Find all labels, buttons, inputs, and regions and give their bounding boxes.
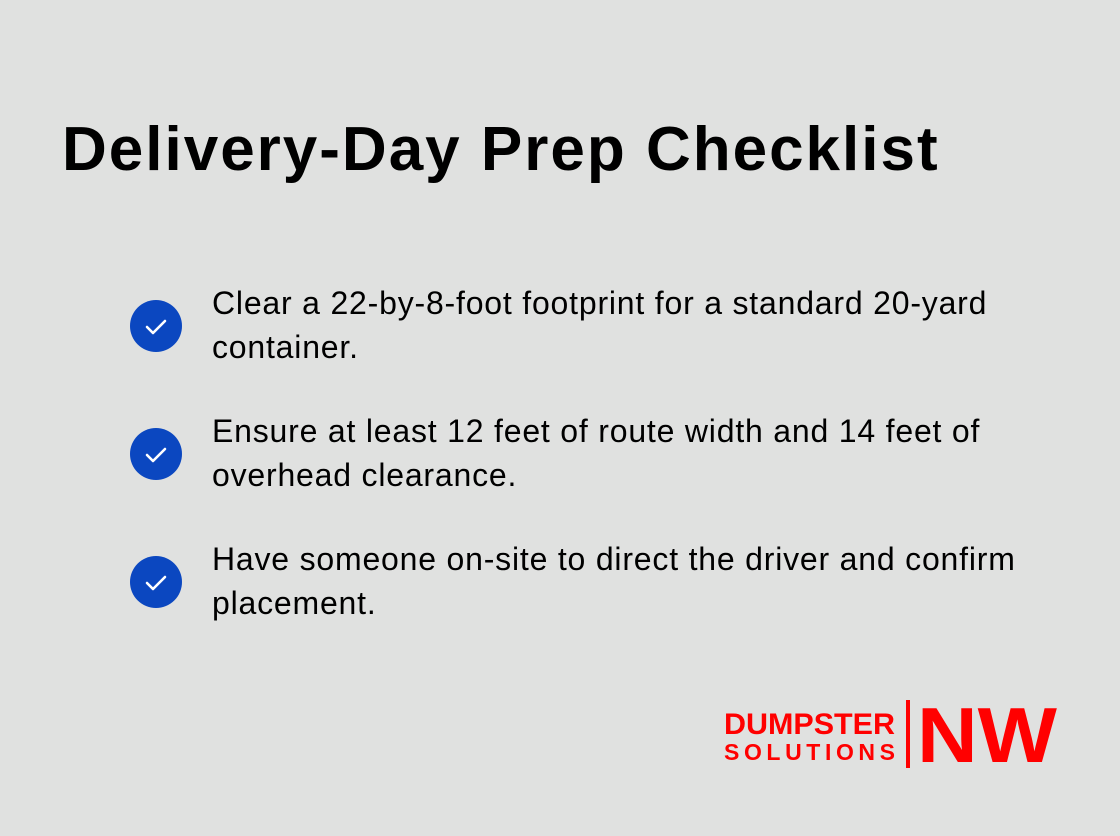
- logo: Dumpster Solutions NW: DUMPSTER: [724, 708, 895, 741]
- text item 2: overhead clearance.: [212, 457, 517, 493]
- checklist item 2: [130, 413, 980, 493]
- text item 2: [212, 413, 980, 493]
- text item 3: placement.: [212, 585, 377, 621]
- text item 3: [212, 541, 1016, 621]
- text item 1: Clear a 22-by-8-foot footprint for a standard 20-yard: [212, 285, 987, 321]
- text item 3: Have someone on-site to direct the driver and confirm: [212, 541, 1016, 577]
- text item 1: [212, 285, 987, 365]
- text item 2: Ensure at least 12 feet of route width and 14 feet of: [212, 413, 980, 449]
- icon: check: [130, 428, 182, 480]
- checklist item 3: [130, 541, 1016, 621]
- icon: check: [130, 300, 182, 352]
- text item 1: container.: [212, 329, 359, 365]
- title: Delivery-Day Prep Checklist: [62, 115, 940, 184]
- logo: Dumpster Solutions NW: [724, 698, 1057, 770]
- checklist item 1: [130, 285, 987, 365]
- icon: check: [130, 556, 182, 608]
- logo: Dumpster Solutions NW: SOLUTIONS: [724, 739, 895, 765]
